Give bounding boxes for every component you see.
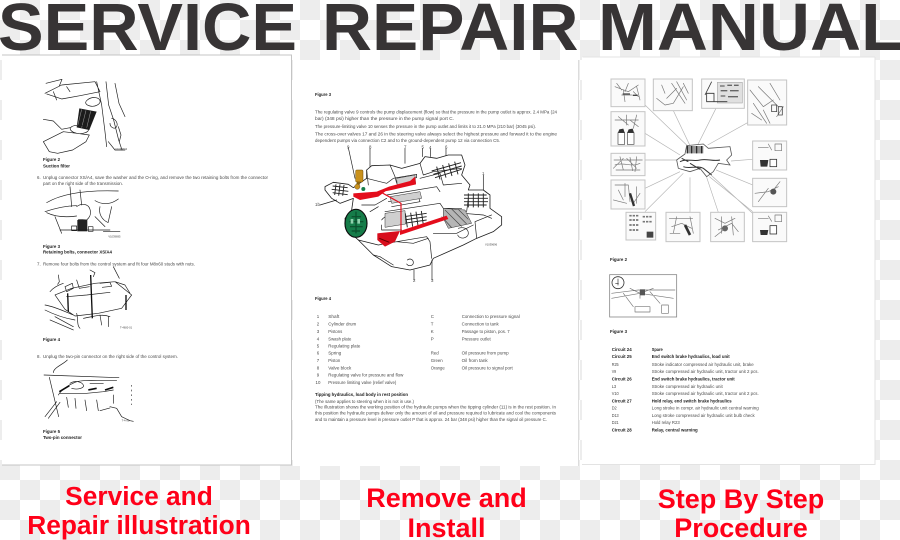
figure 2 heading: Figure 2 <box>610 257 628 262</box>
circuit table: D2 <box>612 406 617 410</box>
figure 4 illustration: control system <box>45 267 133 330</box>
connections and colour legend: Connection to tank <box>462 322 500 326</box>
figure 4 illustration: control system: T-4600-01 <box>120 325 133 329</box>
caption: service and repair illustration <box>27 481 251 540</box>
connections and colour legend: C <box>431 314 434 319</box>
caption: remove and install: Remove and <box>366 483 527 513</box>
parts legend: 7 <box>317 358 320 363</box>
inset L <box>753 178 787 207</box>
figure 3 caption: Figure 3 <box>43 244 61 249</box>
parts legend <box>316 314 404 385</box>
pump silhouette <box>325 155 502 270</box>
tipping hydraulics paragraph <box>315 399 557 422</box>
pump callout numbers: 8 <box>369 144 372 150</box>
caption: service and repair illustration: Service and <box>65 481 213 511</box>
step 6 text <box>37 175 269 186</box>
figure 3 illustration: connector: V1039695 <box>108 234 121 238</box>
shaded bores <box>385 175 422 227</box>
circuit table: Circuit 27 <box>612 398 632 404</box>
parts legend: 4 <box>317 336 320 341</box>
springs <box>332 162 488 227</box>
connections and colour legend: Orange <box>431 365 445 370</box>
parts legend: Swash plate <box>328 336 352 341</box>
connections and colour legend: Connection to pressure signal <box>462 314 520 319</box>
tipping hydraulics paragraph: and to maintain a pressure level in pressure outlet P that is approx. 24 bar (348 psi) higher than the signal oil pressure C. <box>315 417 547 422</box>
two-pin connector caption: Two-pin connector <box>43 435 82 440</box>
truck <box>677 144 732 177</box>
connections and colour legend: Red <box>431 351 439 356</box>
circuit table: L3 <box>612 384 617 389</box>
casing lines <box>320 148 492 280</box>
suction filter caption: Suction filter <box>43 164 70 168</box>
circuit table <box>612 347 759 432</box>
figure 3 heading: Figure 3 <box>315 92 332 97</box>
step 7 text: Remove four bolts from the control system and fit four M8x60 studs with nuts. <box>43 262 195 266</box>
inset H <box>626 212 656 240</box>
vehicle wiring diagram <box>611 79 787 242</box>
circuit table: Circuit 24 <box>612 347 632 352</box>
connections and colour legend: Green <box>431 358 443 363</box>
parts legend: Pistons <box>328 329 343 334</box>
inset C <box>702 79 744 108</box>
hydraulic pump cutaway illustration <box>320 148 502 280</box>
connections and colour legend: T <box>431 322 434 326</box>
parts legend: 2 <box>317 322 320 326</box>
panel: step by step page <box>582 57 875 464</box>
circuit table: Stroke indicator compressed air hydraulic unit, brake <box>652 362 754 367</box>
figure 5 illustration: two-pin connector: T-4-96 <box>122 419 130 423</box>
connections and colour legend: P <box>431 336 434 341</box>
inset A <box>611 79 645 107</box>
inset E <box>611 112 645 146</box>
tipping hydraulics paragraph: (The same applies to steering when it is not in use.) <box>315 399 415 404</box>
connections and colour legend: K <box>431 329 434 334</box>
pump callout numbers: 9 <box>347 144 350 150</box>
pump callout numbers: 4 <box>429 145 432 150</box>
circuit table: End switch brake hydraulics, load unit <box>652 354 730 359</box>
circuit table: Stroke compressed air hydraulic unit, tractor unit 2 pcs. <box>652 391 759 396</box>
figure 3 heading: Figure 3 <box>610 329 628 334</box>
parts legend: Regulating plate <box>328 343 361 348</box>
parts legend: 9 <box>317 373 320 378</box>
panel: remove and install page <box>293 60 579 466</box>
step 8 text: 8. <box>37 354 41 359</box>
pump callout numbers: 1b <box>315 202 320 207</box>
pump callout numbers: 7 <box>404 144 407 150</box>
retaining bolts caption: Retaining bolts, connector XS/A4 <box>43 250 113 254</box>
circuit table: Hold relay, end switch brake hydraulics <box>652 398 732 404</box>
inset J <box>711 212 744 242</box>
tipping hydraulics paragraph: this position the hydraulic pumps deliver only the amount of oil and pressure required to lubricate and cool the components <box>315 410 557 416</box>
parts legend: 1 <box>317 314 320 319</box>
inset K <box>753 212 787 242</box>
inset G <box>611 180 645 209</box>
figure 2 illustration: suction filter <box>43 79 128 153</box>
hydraulic pump cutaway illustration: V1039696 <box>485 243 498 247</box>
circuit table: Stroke compressed air hydraulic unit, tractor unit 2 pcs. <box>652 369 759 374</box>
figure 2 caption: Figure 2 <box>43 157 61 162</box>
tipping hydraulics heading: Tipping hydraulics, load body in rest position <box>315 392 408 397</box>
caption: step by step procedure <box>658 484 824 540</box>
connections and colour legend: Oil from tank <box>462 358 489 363</box>
caption: remove and install <box>366 483 527 540</box>
pump callout numbers: 6 <box>445 144 448 150</box>
parts legend: Pressure limiting valve (relief valve) <box>328 380 397 385</box>
parts legend: Regulating valve for pressure and flow <box>328 373 404 378</box>
step 7 text: 7. <box>37 262 41 266</box>
circuit table: R25 <box>612 362 619 367</box>
step 6 text: Unplug connector XS/A4, save the washer and the O-ring, and remove the two retaining bolts from the connector <box>43 175 269 180</box>
regulating valve paragraph: dependent pumps via connection C2 and to the ground-dependent pump 12 via connection C5. <box>315 138 500 143</box>
caption: step by step procedure: Step By Step <box>658 484 824 514</box>
connections and colour legend: Passage to piston, pos. 7 <box>462 329 510 334</box>
regulating valve paragraph: The cross-over valves 17 and 26 in the steering valve always select the highest pressure and forward it to the engine <box>315 132 558 136</box>
circuit table: Circuit 28 <box>612 428 632 432</box>
parts legend: 6 <box>317 351 320 356</box>
circuit table: Circuit 25 <box>612 354 632 359</box>
step 6 text: part on the right side of the transmission. <box>43 181 123 186</box>
figure 3 illustration: connector <box>45 187 121 238</box>
connections and colour legend: Oil pressure from pump <box>462 351 509 356</box>
figure 4 caption: Figure 4 <box>43 337 61 342</box>
connections and colour legend: Oil pressure to signal port <box>462 365 513 370</box>
pump callout numbers: 1 <box>482 171 485 176</box>
figure 5 illustration: two-pin connector <box>44 360 133 423</box>
green port <box>345 209 367 237</box>
figure 2 illustration: suction filter: V1039694 <box>115 147 128 151</box>
parts legend: 10 <box>316 380 321 385</box>
pump callout numbers <box>315 144 485 283</box>
circuit table: Spare <box>652 347 663 352</box>
title <box>0 0 900 65</box>
regulating valve paragraph: The pressure-limiting valve 10 senses the pressure in the pump outlet and limits it to 21.0 MPa (210 bar) (3045 psi). <box>315 124 536 129</box>
panel: service and repair page <box>2 55 292 465</box>
regulating valve paragraph <box>315 110 558 143</box>
circuit table: Circuit 26 <box>612 376 632 382</box>
connector lines <box>645 105 753 213</box>
parts legend: Piston <box>328 358 341 363</box>
connections and colour legend <box>431 314 520 370</box>
pump callout numbers: 3 <box>431 278 434 283</box>
parts legend: 5 <box>317 343 320 348</box>
parts legend: Valve block <box>328 365 352 370</box>
regulating valve paragraph: The regulating valve 9 controls the pump displacement (flow) so that the pressure in the pump outlet is approx. 2.4 MPa (24 <box>315 110 558 114</box>
pump callout numbers: 2 <box>413 278 416 283</box>
figure 4 heading: Figure 4 <box>315 296 332 301</box>
inset I <box>666 212 700 242</box>
orange valve <box>356 170 363 182</box>
circuit table: Stroke compressed air hydraulic unit <box>652 384 723 389</box>
figure 5 caption: Figure 5 <box>43 429 61 434</box>
circuit table: D13 <box>612 413 619 418</box>
parts legend: Spring <box>328 351 342 356</box>
regulating valve paragraph: bar) (348 psi) higher than the pressure in the pump signal port C. <box>315 116 454 121</box>
parts legend: 8 <box>317 365 320 370</box>
inset F <box>611 153 645 176</box>
dashboard diagram <box>610 275 677 317</box>
step 6 text: 6. <box>37 175 41 180</box>
circuit table: Long stroke compressed air hydraulic unit bulb check <box>652 413 755 418</box>
inset M <box>753 141 787 170</box>
circuit table: V9 <box>612 369 617 374</box>
red oil channels <box>353 190 387 200</box>
tipping hydraulics paragraph: The illustration shows the working position of the hydraulic pumps when the tipping cylinder (11) is in the rest position. In <box>315 404 557 410</box>
inset B <box>653 79 692 111</box>
step 8 text: Unplug the two-pin connector on the right side of the control system. <box>43 354 178 359</box>
caption: service and repair illustration: Repair illustration <box>27 510 251 540</box>
parts legend: 3 <box>317 329 320 334</box>
connections and colour legend: Pressure outlet <box>462 336 491 341</box>
pump callout numbers: 5 <box>422 144 424 150</box>
parts legend: Shaft <box>328 314 340 319</box>
circuit table: V10 <box>612 391 619 396</box>
circuit table: Relay, central warning <box>652 428 698 432</box>
circuit table: End switch brake hydraulics, tractor unit <box>652 376 735 382</box>
circuit table: Hold relay R23 <box>652 420 680 425</box>
circuit table: Long stroke in compr. air hydraulic unit central warning <box>652 406 759 410</box>
circuit table: D21 <box>612 420 619 425</box>
inset D <box>748 80 787 125</box>
parts legend: Cylinder drum <box>328 322 357 326</box>
